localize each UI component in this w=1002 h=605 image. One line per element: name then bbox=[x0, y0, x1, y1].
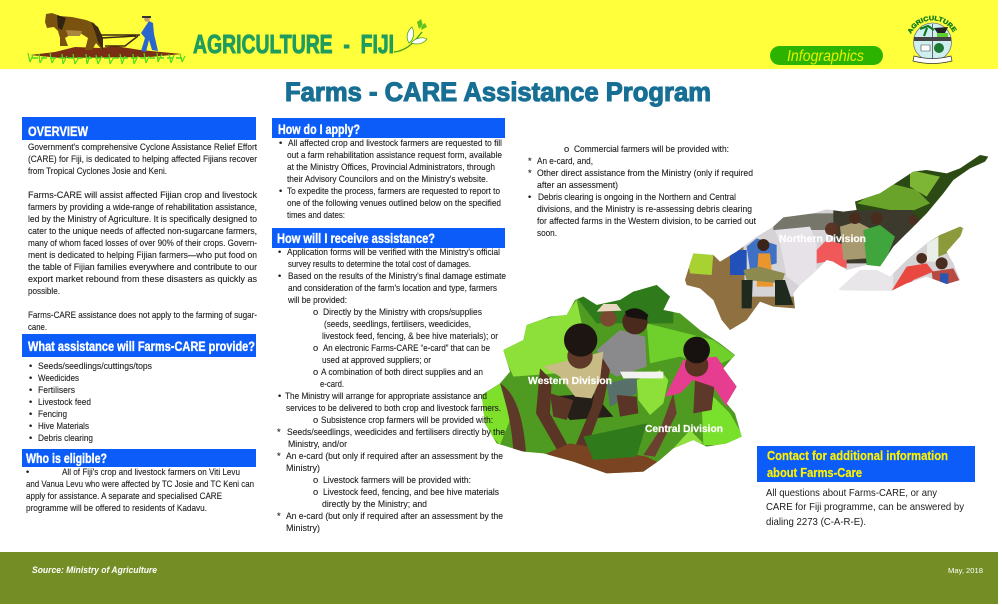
eligibility text: programme will be offered to residents of Kadavu. bbox=[26, 502, 207, 513]
hat man bbox=[600, 310, 617, 327]
assistance details text: Seeds/seedlings, weedicides and fertilisers directly by the bbox=[287, 426, 505, 437]
assistance details text: The Ministry will arrange for appropriate assistance and bbox=[285, 390, 487, 401]
apply text: times and dates: bbox=[287, 209, 345, 220]
overview body text: Farms-CARE will assist affected Fijian crop and livestock bbox=[28, 189, 257, 200]
text block: commercial farmers and debris clearing: * bbox=[528, 167, 532, 178]
assistance details text: and consideration of the farm's location and type, farmers bbox=[288, 282, 497, 293]
man in grey shirt bbox=[597, 330, 647, 377]
text block: commercial farmers and debris clearing: Commercial farmers will be provided with: bbox=[574, 143, 729, 154]
text block: commercial farmers and debris clearing: Other direct assistance from the Ministry (only if required bbox=[537, 167, 753, 178]
apply text: one of the following venues outlined below on the specified bbox=[287, 197, 501, 208]
assistance details text: • bbox=[278, 246, 281, 257]
panel: what assistance will Farms-CARE provide bbox=[22, 334, 256, 443]
text block: commercial farmers and debris clearing: * bbox=[528, 155, 532, 166]
contact text: CARE for Fiji programme, can be answered by bbox=[766, 501, 965, 513]
map labels: division names: Western Division bbox=[528, 375, 612, 387]
map labels: division names: Northern Division bbox=[779, 233, 866, 245]
eligibility text: All of Fiji's crop and livestock farmers on Viti Levu bbox=[62, 466, 240, 477]
text block: commercial farmers and debris clearing: for affected farms in the Western division, to be carried out bbox=[537, 215, 756, 226]
assistance list: • bbox=[29, 384, 32, 395]
panel: overview bbox=[22, 117, 257, 332]
panel: how do I apply bbox=[272, 118, 505, 220]
text block: commercial farmers and debris clearing bbox=[528, 143, 756, 238]
eligibility text: apply for assistance. A separate and specialised CARE bbox=[26, 490, 222, 501]
assistance details text: o bbox=[313, 342, 318, 353]
assistance details text: Application forms will be verified with the Ministry's official bbox=[287, 246, 500, 257]
assistance details text: * bbox=[277, 426, 281, 437]
icon: leaf sprig bbox=[394, 19, 427, 52]
map labels: division names: Central Division bbox=[645, 423, 723, 435]
text block: commercial farmers and debris clearing: o bbox=[564, 143, 569, 154]
assistance details text: Directly by the Ministry with crops/supplies bbox=[323, 306, 482, 317]
contact text bbox=[766, 487, 965, 528]
assistance details text: * bbox=[277, 450, 281, 461]
assistance list: • bbox=[29, 396, 32, 407]
overview body text: Government's comprehensive Cyclone Assistance Relief Effort bbox=[28, 141, 257, 152]
panel: how will I receive assistance bbox=[272, 228, 506, 533]
assistance details text: directly by the Ministry; and bbox=[322, 498, 427, 509]
assistance list bbox=[29, 360, 152, 443]
assistance details text: o bbox=[313, 414, 318, 425]
assistance details text: Ministry) bbox=[286, 462, 320, 473]
assistance details text: A combination of both direct supplies and an bbox=[321, 366, 483, 377]
assistance details text: Ministry, and/or bbox=[288, 438, 347, 449]
callout: contact for additional information bbox=[757, 446, 975, 528]
assistance list: Fertilisers bbox=[38, 384, 75, 395]
contact text: dialing 2273 (C-A-R-E). bbox=[766, 516, 866, 528]
overview body text: ment is dedicated to helping Fijian farmers—who put food on bbox=[28, 249, 257, 260]
map: Northern Division photo bbox=[680, 150, 993, 337]
text block: commercial farmers and debris clearing: Debris clearing is ongoing in the Northern and Central bbox=[538, 191, 736, 202]
assistance details text: e-card. bbox=[320, 378, 344, 389]
assistance details text: • bbox=[278, 390, 281, 401]
overview body text: from Tropical Cyclones Josie and Keni. bbox=[28, 165, 167, 176]
eligibility text: • bbox=[26, 466, 29, 477]
panel: how do I apply: How do I apply? bbox=[278, 122, 360, 137]
overview body text bbox=[28, 141, 257, 332]
overview body text: many of whom faced losses of over 90% of their crops. Govern- bbox=[28, 237, 257, 248]
text block: commercial farmers and debris clearing: after an assessment) bbox=[537, 179, 618, 190]
map: Western and Central Division photo bbox=[482, 285, 742, 474]
eligibility text: and Vanua Levu who were affected by TC Josie and TC Keni can bbox=[26, 478, 254, 489]
assistance details text: Based on the results of the Ministry's final damage estimate bbox=[288, 270, 506, 281]
overview body text: farmers by providing a wide-range of rehabilitation assistance, bbox=[28, 201, 257, 212]
apply text bbox=[279, 137, 502, 220]
brand name: Agriculture - Fiji: AGRICULTURE - FIJI bbox=[193, 29, 394, 59]
map labels: division names bbox=[528, 233, 866, 435]
panel: overview: OVERVIEW bbox=[28, 124, 88, 139]
assistance details text: will be provided: bbox=[287, 294, 347, 305]
assistance details text: An electronic Farms-CARE “e-card” that can be bbox=[323, 342, 490, 353]
assistance details text: An e-card (but only if required after an assessment by the bbox=[286, 510, 503, 521]
overview body text: led by the Ministry of Agriculture. It is specifically designed to bbox=[28, 213, 257, 224]
contact text: All questions about Farms-CARE, or any bbox=[766, 487, 938, 499]
assistance details text: o bbox=[313, 486, 318, 497]
apply text: To expedite the process, farmers are requested to report to bbox=[287, 185, 500, 196]
overview body text: cater to the unique needs of affected non-sugarcane farmers, bbox=[28, 225, 257, 236]
eligibility text bbox=[26, 466, 254, 513]
badge: Infographics bbox=[770, 46, 883, 65]
footer band bbox=[0, 552, 998, 604]
assistance list: Livestock feed bbox=[38, 396, 91, 407]
assistance details text: Subsistence crop farmers will be provided with: bbox=[321, 414, 493, 425]
panel: who is eligible bbox=[22, 449, 256, 513]
assistance list: Seeds/seedlings/cuttings/tops bbox=[38, 360, 152, 371]
apply text: All affected crop and livestock farmers are requested to fill bbox=[288, 137, 502, 148]
overview body text: Farms-CARE assistance does not apply to the farming of sugar- bbox=[28, 309, 257, 320]
panel: what assistance will Farms-CARE provide: What assistance will Farms-CARE provide? bbox=[28, 339, 255, 354]
badge: Infographics: Infographics bbox=[787, 48, 864, 65]
assistance details text: o bbox=[313, 366, 318, 377]
assistance list: Hive Materials bbox=[38, 420, 89, 431]
apply text: • bbox=[279, 137, 282, 148]
logo: Ministry of Agriculture crest: AGRICULTURE bbox=[908, 16, 957, 34]
text block: commercial farmers and debris clearing: divisions, and the Ministry is re-assessing debris clearing bbox=[537, 203, 752, 214]
assistance list: Weedicides bbox=[38, 372, 79, 383]
text block: commercial farmers and debris clearing: soon. bbox=[537, 227, 557, 238]
assistance list: Fencing bbox=[38, 408, 67, 419]
assistance details text: livestock feed, fencing, & bee hive materials); or bbox=[322, 330, 498, 341]
overview body text: export market rebound from these disasters as quickly as bbox=[28, 273, 257, 284]
assistance list: • bbox=[29, 420, 32, 431]
footer date: May, 2018 bbox=[948, 566, 983, 575]
assistance details text: o bbox=[313, 474, 318, 485]
assistance details text: Ministry) bbox=[286, 522, 320, 533]
apply text: out a farm rehabilitation assistance request form, available bbox=[287, 149, 502, 160]
assistance details text: (seeds, seedlings, fertilisers, weedicides, bbox=[324, 318, 471, 329]
title: Farms - CARE Assistance Program bbox=[285, 77, 711, 107]
assistance details text: Livestock feed, fencing, and bee hive materials bbox=[323, 486, 499, 497]
assistance details text: o bbox=[313, 306, 318, 317]
text block: commercial farmers and debris clearing: • bbox=[528, 191, 531, 202]
assistance details text: used at approved suppliers; or bbox=[322, 354, 431, 365]
overview body text: (CARE) for Fiji, is dedicated to helping affected Fijians recover bbox=[28, 153, 257, 164]
overview body text: cane. bbox=[28, 321, 47, 332]
crouching man bbox=[559, 394, 614, 420]
text block: commercial farmers and debris clearing: An e-card, and, bbox=[537, 155, 593, 166]
assistance details text: * bbox=[277, 510, 281, 521]
assistance details text bbox=[277, 246, 506, 533]
assistance details text: survey results to determine the total cost of damages. bbox=[288, 258, 471, 269]
header band bbox=[0, 0, 998, 69]
footer source: Source: Ministry of Agriculture bbox=[32, 565, 158, 576]
assistance details text: An e-card (but only if required after an assessment by the bbox=[286, 450, 503, 461]
callout: contact for additional information: Contact for additional information bbox=[767, 449, 948, 463]
panel: how will I receive assistance: How will I receive assistance? bbox=[277, 231, 435, 246]
panel: who is eligible: Who is eligible? bbox=[26, 451, 107, 466]
man in pink shirt bbox=[643, 393, 677, 457]
assistance list: • bbox=[29, 432, 32, 443]
assistance list: • bbox=[29, 372, 32, 383]
assistance details text: services to be delivered to both crop and livestock farmers. bbox=[286, 402, 501, 413]
apply text: • bbox=[279, 185, 282, 196]
illustration: farmer ploughing with horse bbox=[28, 13, 185, 64]
apply text: at the Ministry Offices, Provincial Administrators, through bbox=[287, 161, 495, 172]
apply text: their Advisory Councilors and on the Ministry's website. bbox=[287, 173, 488, 184]
assistance list: • bbox=[29, 360, 32, 371]
callout: contact for additional information: about Farms-Care bbox=[767, 466, 862, 480]
overview body text: possible. bbox=[28, 285, 60, 296]
ground bbox=[546, 443, 657, 474]
overview body text: the table of Fijian families everywhere and contribute to our bbox=[28, 261, 257, 272]
assistance details text: Livestock farmers will be provided with: bbox=[323, 474, 471, 485]
logo: Ministry of Agriculture crest bbox=[908, 16, 957, 64]
assistance details text: • bbox=[278, 270, 281, 281]
assistance list: • bbox=[29, 408, 32, 419]
assistance list: Debris clearing bbox=[38, 432, 93, 443]
